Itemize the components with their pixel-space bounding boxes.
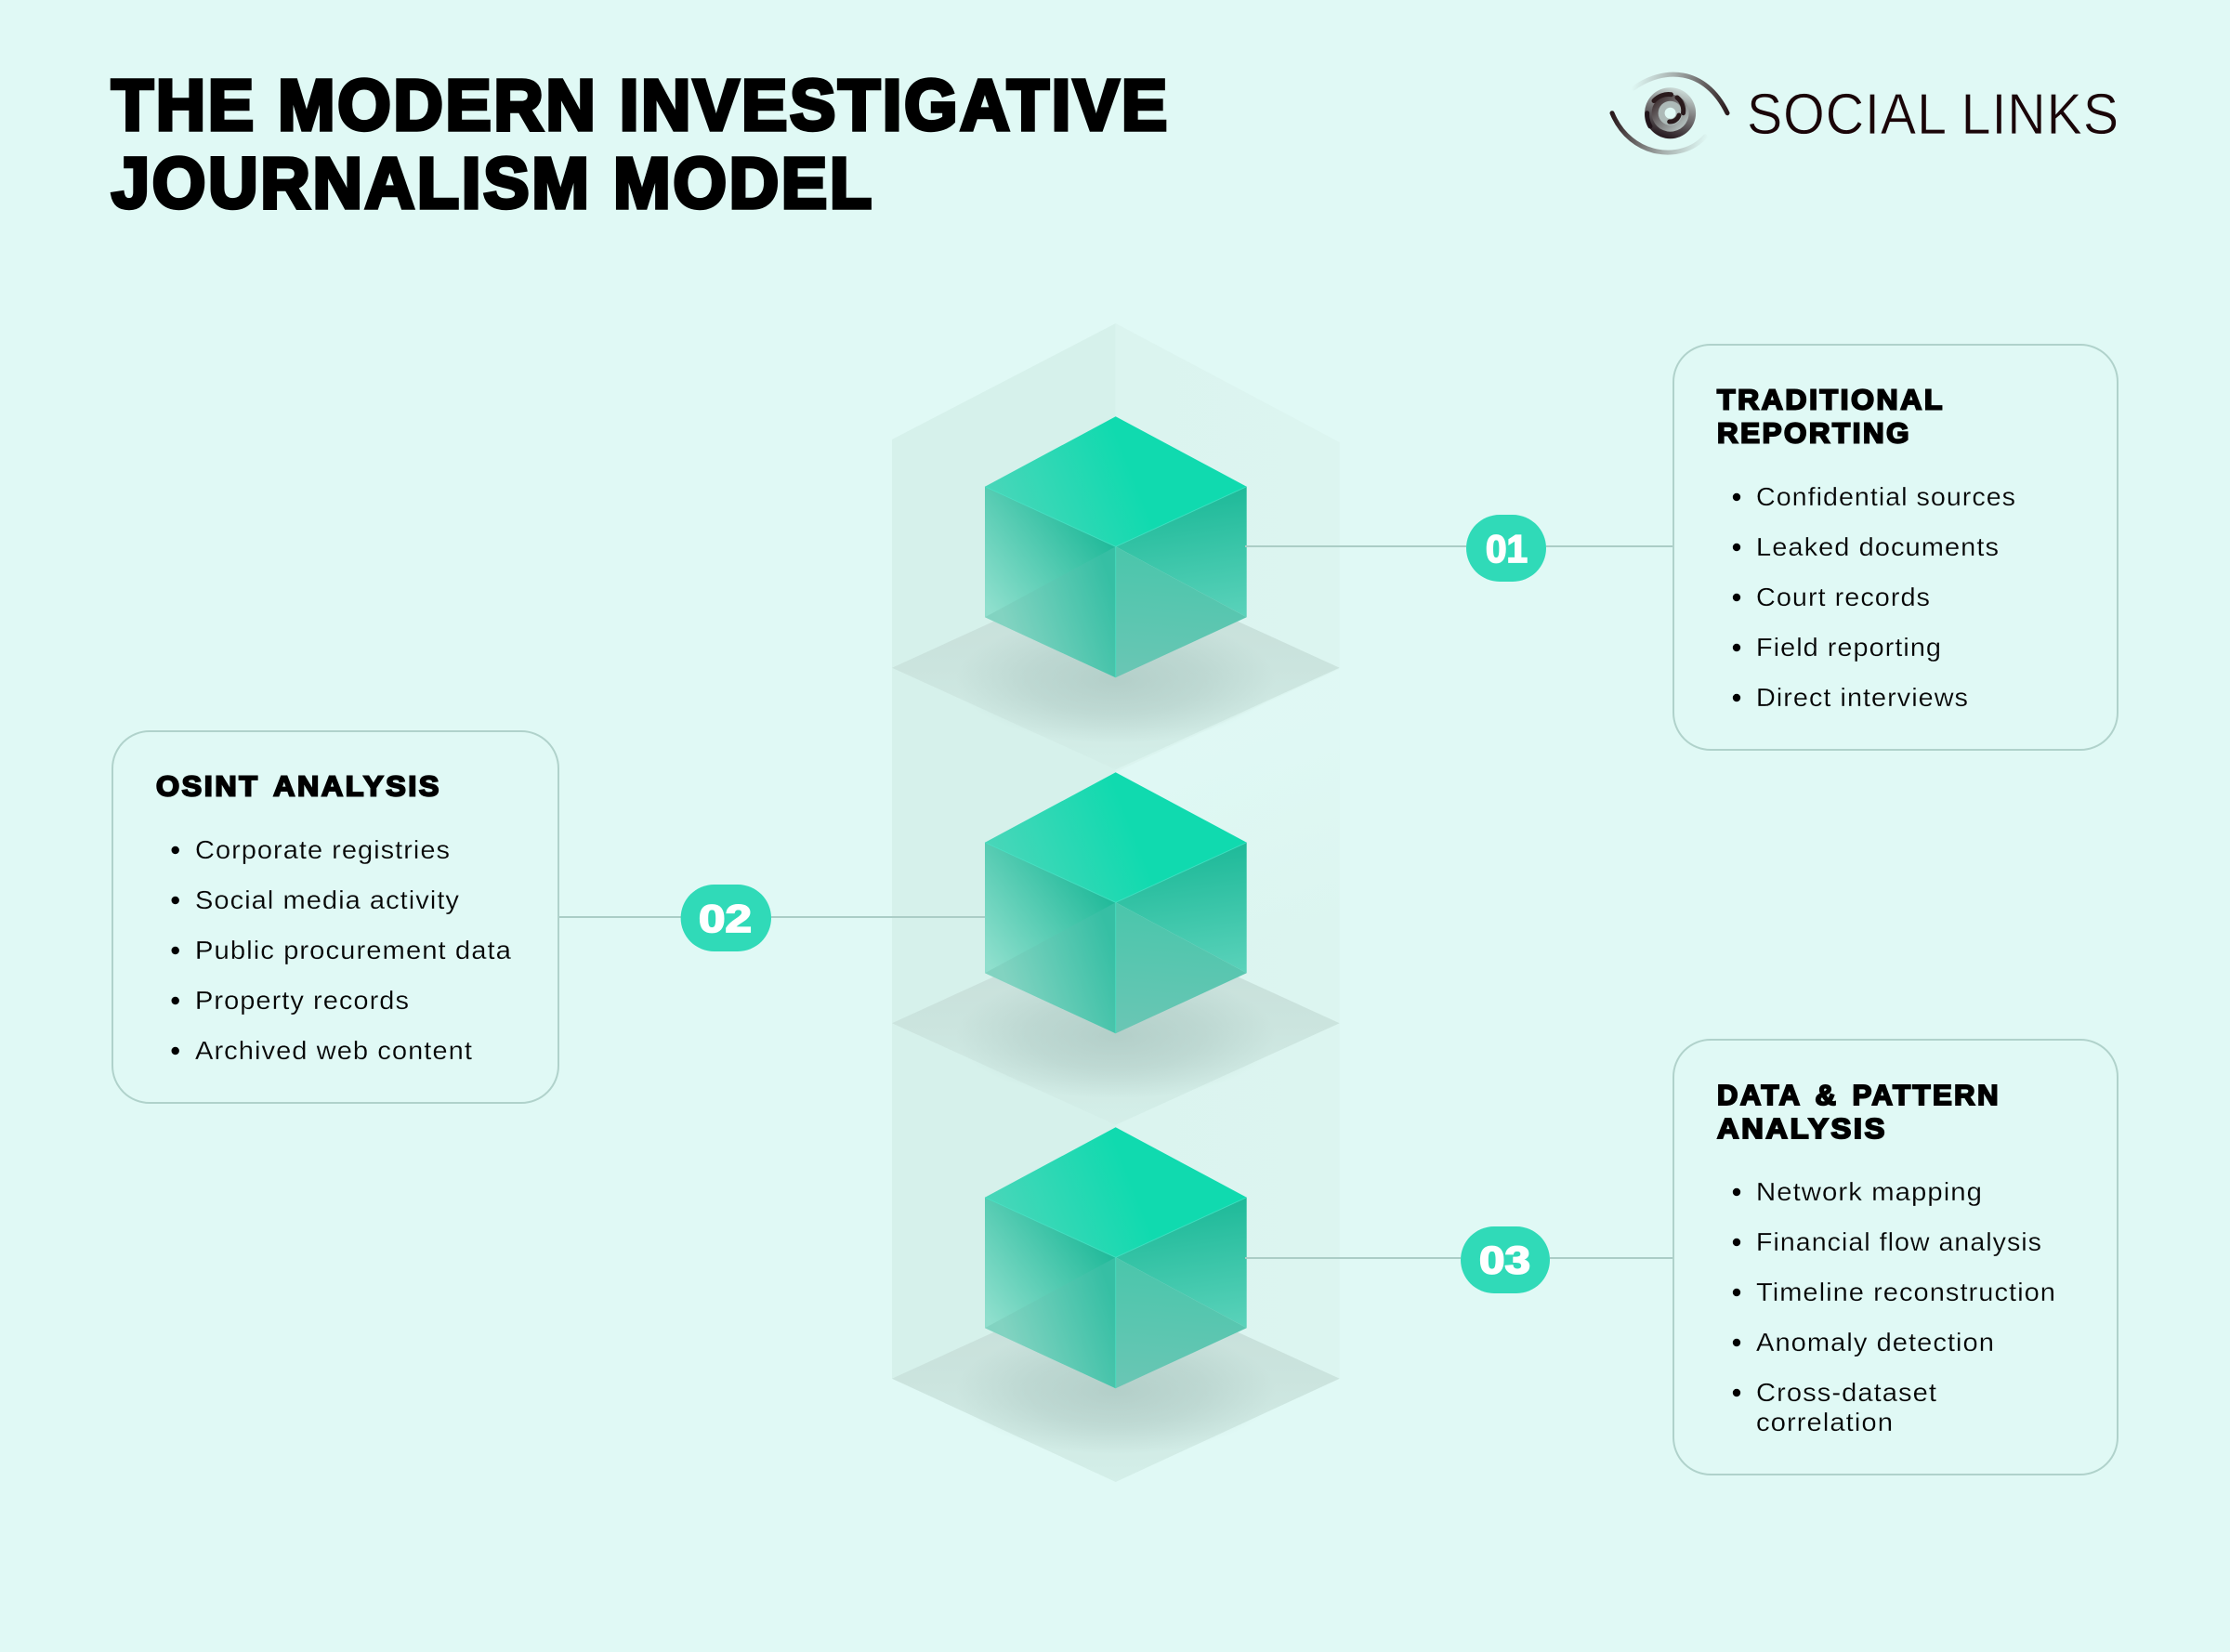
list: data and pattern analysis: Cross-dataset [1756, 1378, 1937, 1407]
list: osint analysis: Public procurement data [195, 936, 512, 964]
cube 2 [985, 772, 1247, 1033]
heading: data and pattern analysis [1717, 1079, 2000, 1145]
icon: eye [1612, 74, 1727, 152]
floor and shadow: level 3 [892, 1277, 1340, 1482]
list: data and pattern analysis: Timeline reconstruction [1756, 1278, 2056, 1306]
logo: Social Links [1612, 74, 2119, 152]
badge 02: 02 [699, 897, 752, 940]
floor and shadow: level 2 [892, 922, 1340, 1125]
badge 01 [1466, 515, 1546, 582]
title [112, 65, 1170, 223]
connector 02 [558, 916, 985, 918]
list: osint analysis [171, 835, 512, 1065]
panel: traditional reporting [1673, 345, 2118, 750]
list: traditional reporting [1733, 482, 2016, 712]
cube 1 [985, 416, 1247, 677]
list: traditional reporting: Confidential sources [1756, 482, 2016, 511]
title: JOURNALISM MODEL [112, 143, 874, 223]
panel: data and pattern analysis [1673, 1040, 2118, 1475]
panel: osint analysis [112, 731, 558, 1103]
logo wordmark: SOCIAL LINKS [1747, 83, 2119, 147]
heading: osint analysis: OSINT ANALYSIS [156, 769, 441, 803]
list: traditional reporting: Direct interviews [1756, 683, 1969, 712]
list: traditional reporting: Court records [1756, 583, 1931, 611]
pillar: stacked glass column [892, 323, 1340, 1481]
cube 3 [985, 1127, 1247, 1388]
badge 01: 01 [1486, 527, 1528, 570]
list: osint analysis: Property records [195, 986, 410, 1015]
floor and shadow: level 1 [892, 566, 1340, 769]
heading: data and pattern analysis: DATA & PATTERN [1717, 1079, 2000, 1111]
list: data and pattern analysis: Financial flow analysis [1756, 1227, 2042, 1256]
list: data and pattern analysis: correlation [1756, 1408, 1894, 1436]
heading: traditional reporting: REPORTING [1717, 416, 1911, 450]
heading: traditional reporting: TRADITIONAL [1717, 383, 1945, 416]
badge 02 [681, 885, 771, 951]
list: osint analysis: Social media activity [195, 885, 460, 914]
badge 03 [1461, 1226, 1550, 1293]
list: data and pattern analysis: Network mapping [1756, 1177, 1983, 1206]
connector 01 [1245, 545, 1673, 547]
list: osint analysis: Corporate registries [195, 835, 451, 864]
list: traditional reporting: Field reporting [1756, 633, 1942, 662]
connector 03 [1245, 1257, 1673, 1259]
title: THE MODERN INVESTIGATIVE [112, 65, 1170, 145]
list: data and pattern analysis [1733, 1177, 2056, 1436]
list: traditional reporting: Leaked documents [1756, 532, 2000, 561]
heading: data and pattern analysis: ANALYSIS [1717, 1112, 1887, 1145]
list: data and pattern analysis: Anomaly detection [1756, 1328, 1995, 1357]
badge 03: 03 [1479, 1238, 1530, 1282]
heading: traditional reporting [1717, 383, 1945, 450]
list: osint analysis: Archived web content [195, 1036, 473, 1065]
